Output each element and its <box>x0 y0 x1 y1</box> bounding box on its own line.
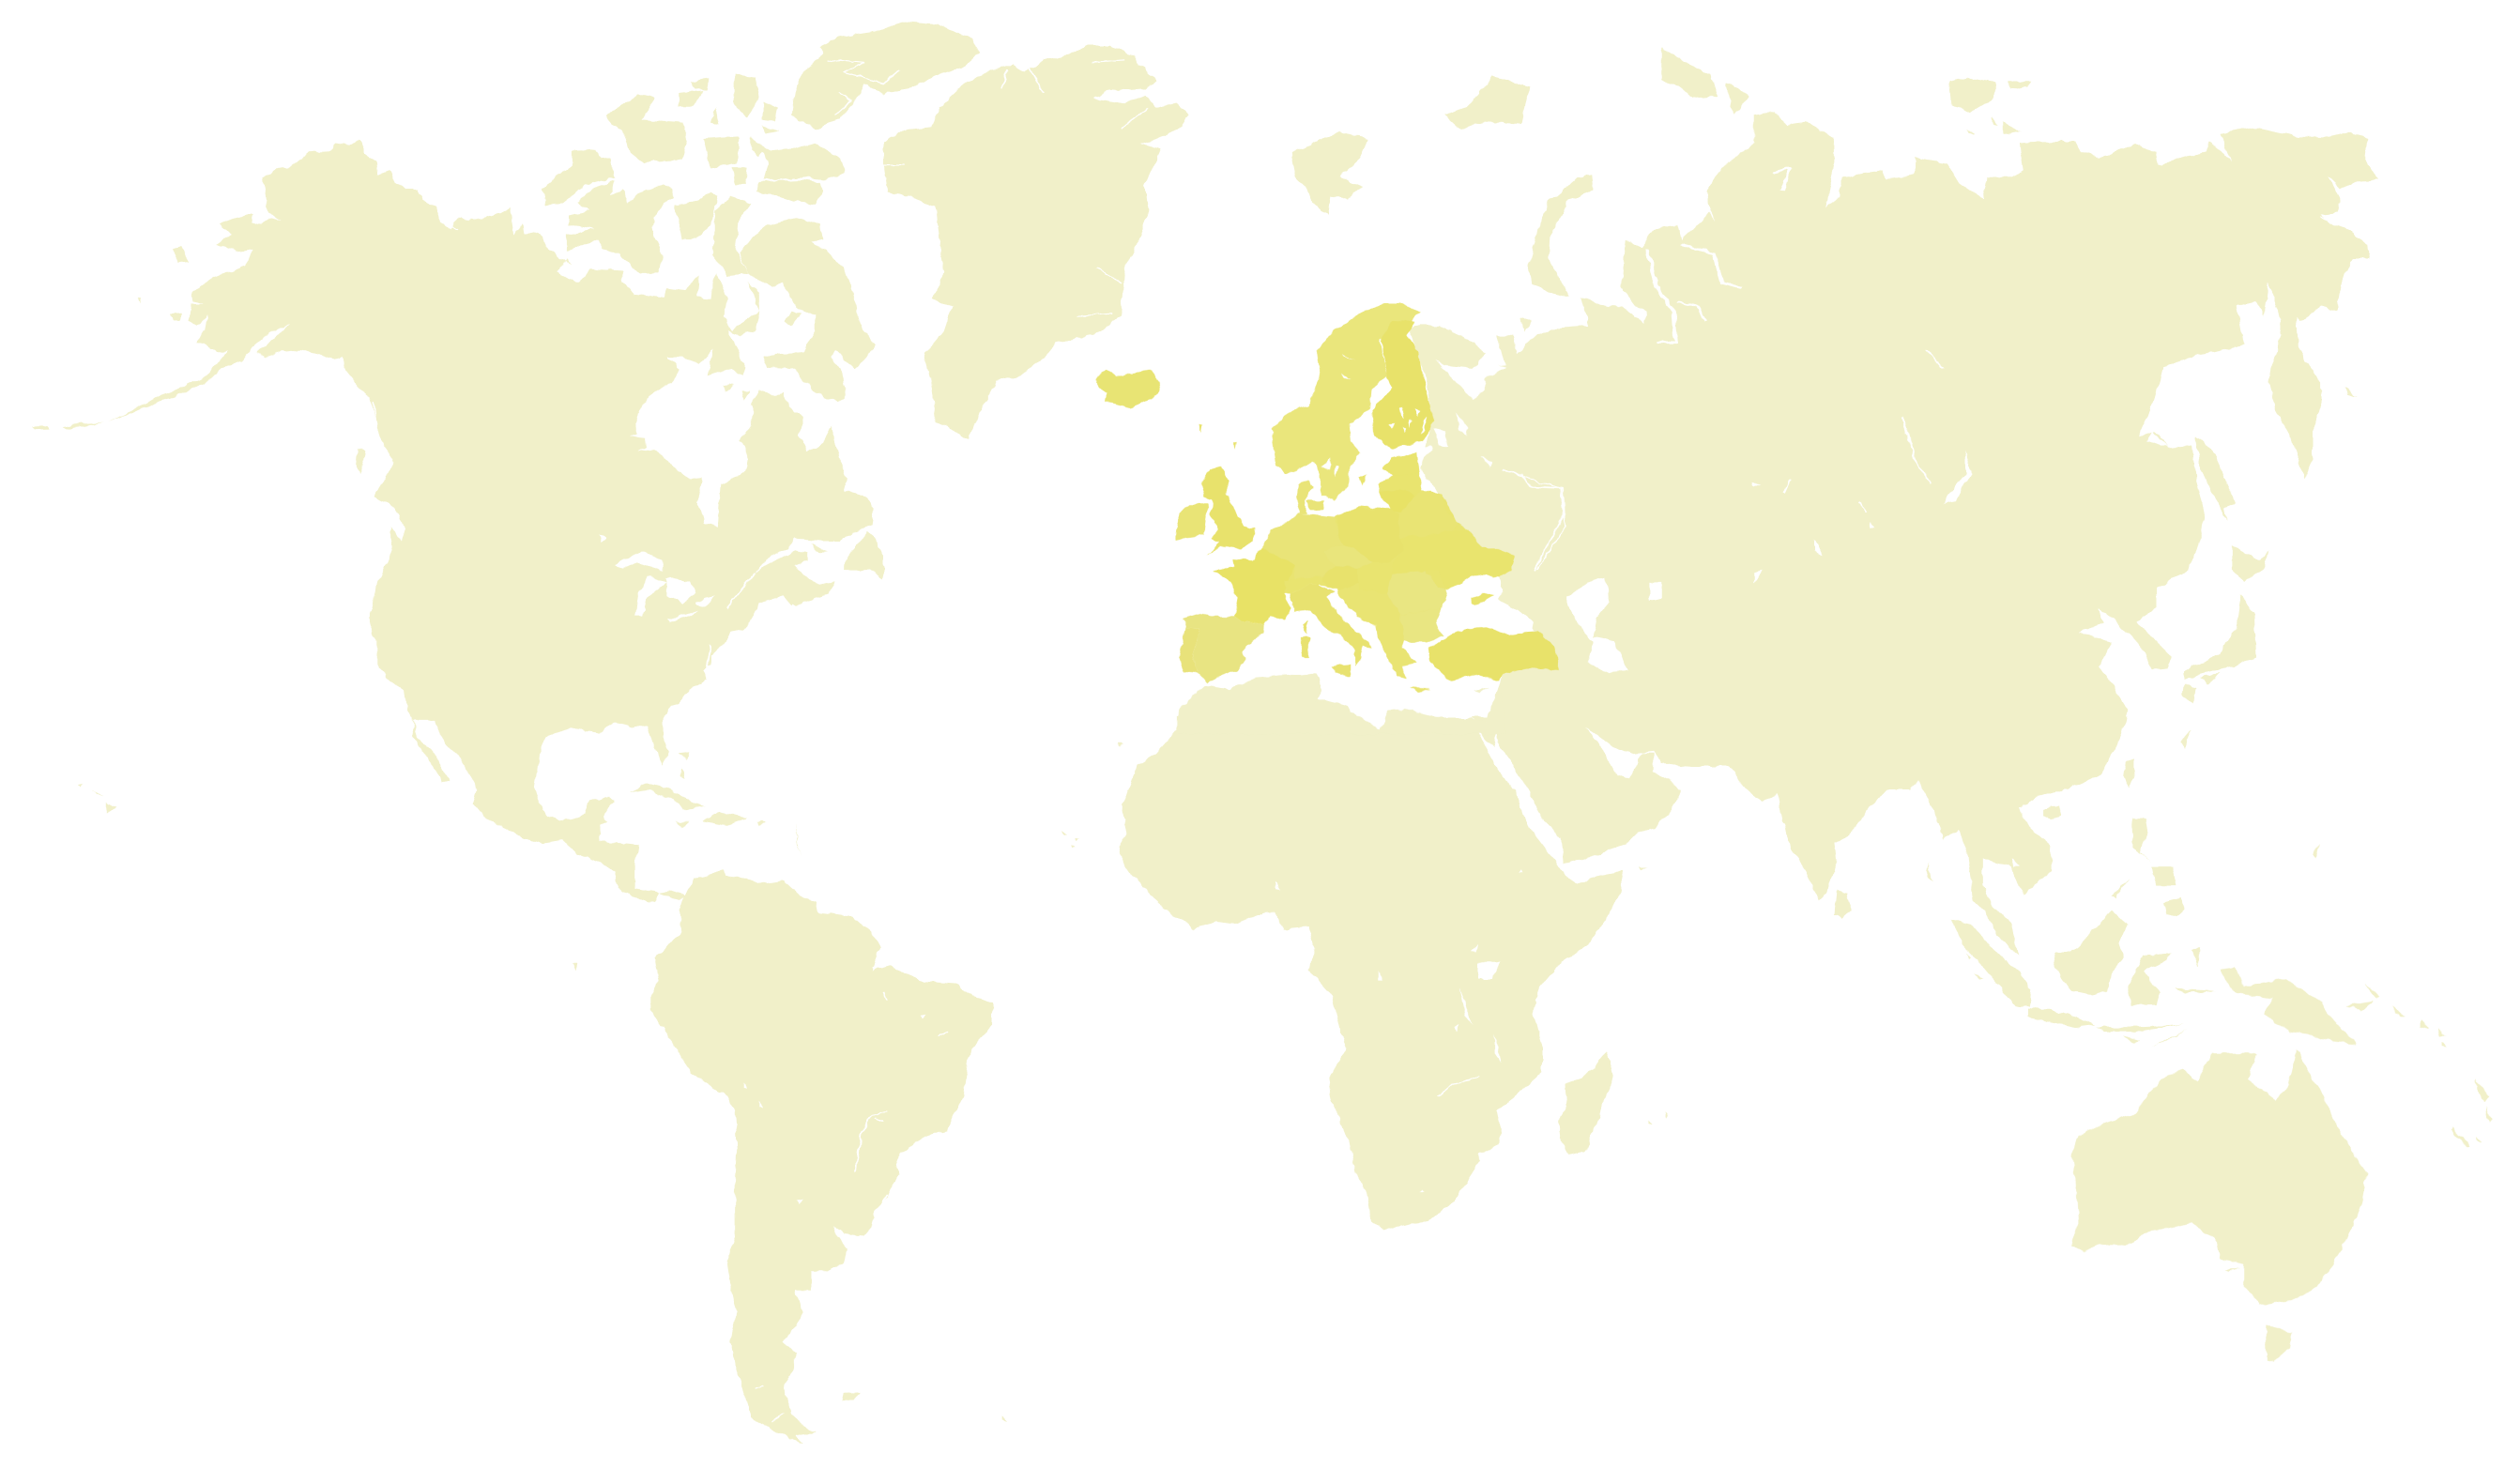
base fill: central and eastern Europe <box>1261 452 1514 641</box>
country: France <box>1214 547 1294 625</box>
country: Estonia and Latvia <box>1360 452 1422 497</box>
country: Iceland <box>1097 369 1160 408</box>
countries: western Balkans and Greece <box>1338 584 1430 692</box>
country: Hungary <box>1358 561 1394 593</box>
panel: Europe highlighted <box>1097 303 1565 734</box>
landmass: North America <box>32 22 980 902</box>
country: Ireland <box>1175 504 1207 540</box>
country: Poland <box>1338 507 1403 563</box>
lakes of Finland and Sweden <box>1321 355 1427 477</box>
country: Finland <box>1371 319 1435 449</box>
landmass: Africa <box>1061 673 1668 1230</box>
country: Belarus <box>1398 490 1457 538</box>
country: United Kingdom <box>1199 424 1254 557</box>
landmass: Greenland <box>883 45 1189 439</box>
landmass: Asia <box>1291 48 2378 1046</box>
country: Italy and islands <box>1290 584 1371 678</box>
country: Ukraine and Crimea <box>1392 530 1514 605</box>
country: Lithuania <box>1380 490 1415 514</box>
country: Bulgaria <box>1400 608 1443 641</box>
country: Czech Republic <box>1323 544 1373 568</box>
landmass: Australia and Oceania <box>2071 844 2491 1362</box>
pale land: North African coast, Cyprus and Russian details <box>1177 317 1565 734</box>
country: Romania <box>1386 571 1447 615</box>
country group: Norway and Sweden <box>1271 303 1420 500</box>
country: Turkey <box>1428 627 1559 681</box>
icon: Sinai peninsula <box>1473 716 1498 748</box>
landmass: South America <box>573 869 1008 1444</box>
country: Austria <box>1321 566 1358 589</box>
countries: Benelux, Germany and Denmark <box>1261 479 1343 579</box>
country: Portugal and Spain <box>1179 614 1264 682</box>
country: Switzerland <box>1285 577 1320 594</box>
